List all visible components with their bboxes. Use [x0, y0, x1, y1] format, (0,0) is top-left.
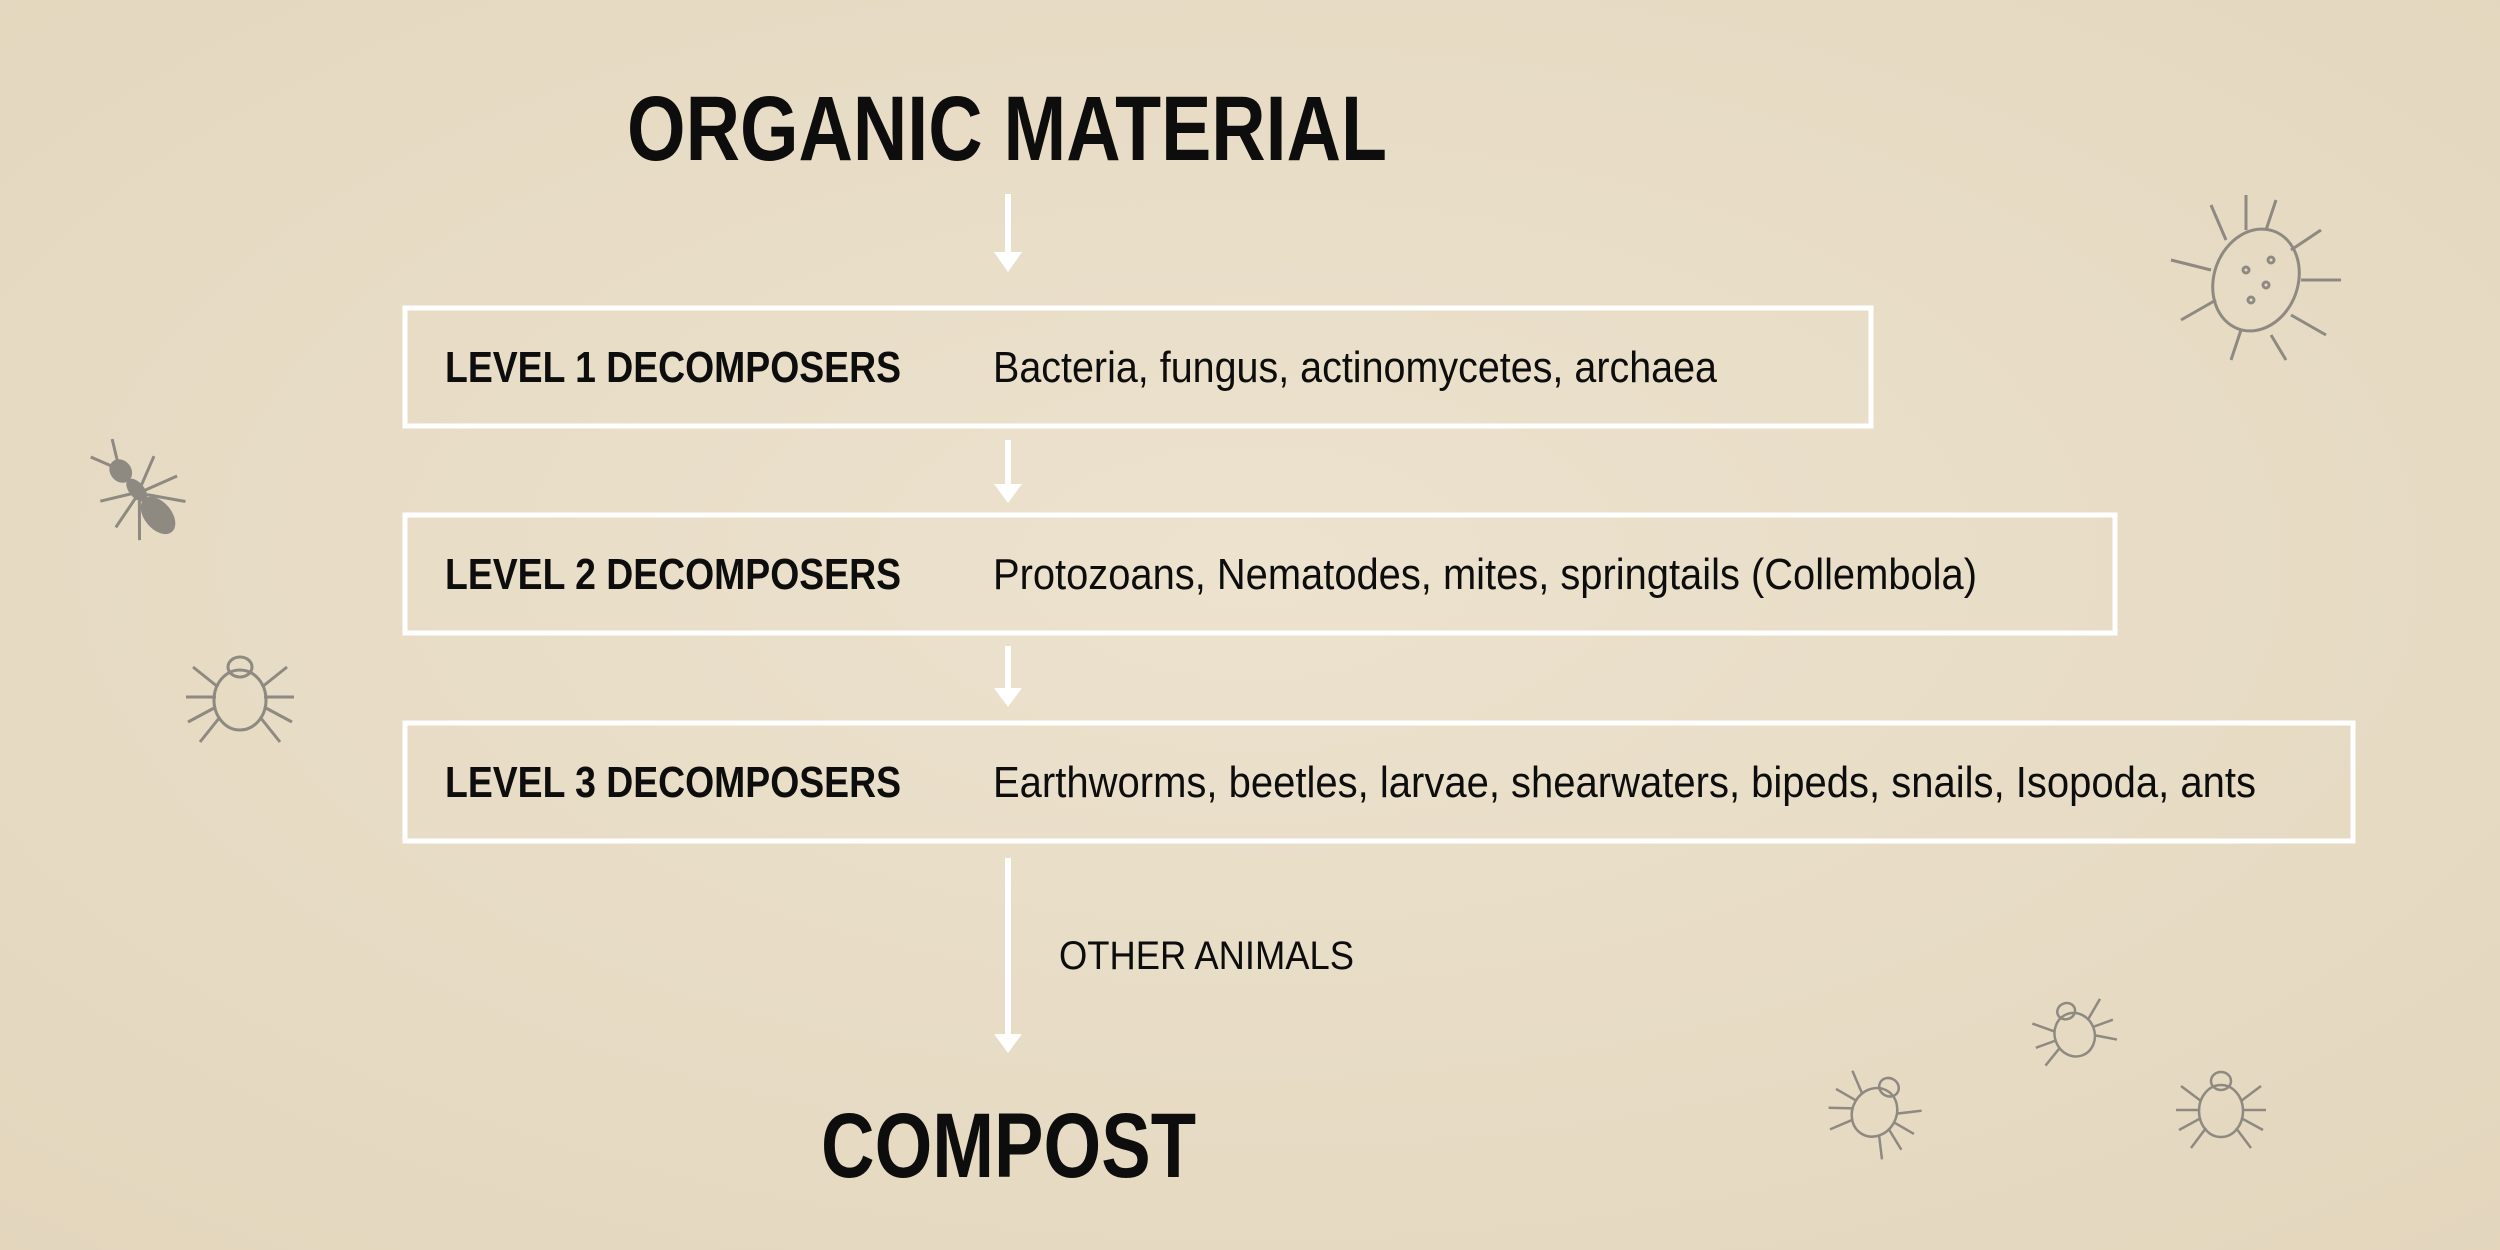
- level 3 description: Earthworms, beetles, larvae, shearwaters, bipeds, snails, Isopoda, ants: [993, 758, 2256, 807]
- icon: tick bottom middle: [1817, 1057, 1932, 1167]
- icon: tick small right: [2025, 990, 2121, 1069]
- level 2 label: LEVEL 2 DECOMPOSERS: [445, 550, 901, 599]
- icon: tick left: [186, 657, 294, 742]
- level 3 label: LEVEL 3 DECOMPOSERS: [445, 758, 901, 807]
- title: ORGANIC MATERIAL: [627, 78, 1387, 180]
- level 1 description: Bacteria, fungus, actinomycetes, archaea: [993, 343, 1717, 392]
- icon: mite large: [2171, 195, 2341, 360]
- arrow: title to level 1: [994, 194, 1022, 272]
- panel: level 1: [405, 308, 1871, 426]
- icon: tick bottom right: [2176, 1072, 2266, 1148]
- arrow: level 1 to level 2: [994, 440, 1022, 503]
- compost heading: COMPOST: [821, 1095, 1196, 1197]
- panel: level 3: [405, 723, 2353, 841]
- level 2 description: Protozoans, Nematodes, mites, springtails (Collembola): [993, 550, 1977, 599]
- arrow: level 3 to compost: [994, 858, 1022, 1053]
- arrow: level 2 to level 3: [994, 646, 1022, 707]
- panel: level 2: [405, 515, 2115, 633]
- other animals label: OTHER ANIMALS: [1059, 934, 1354, 978]
- level 1 label: LEVEL 1 DECOMPOSERS: [445, 343, 901, 392]
- icon: ant: [71, 422, 201, 556]
